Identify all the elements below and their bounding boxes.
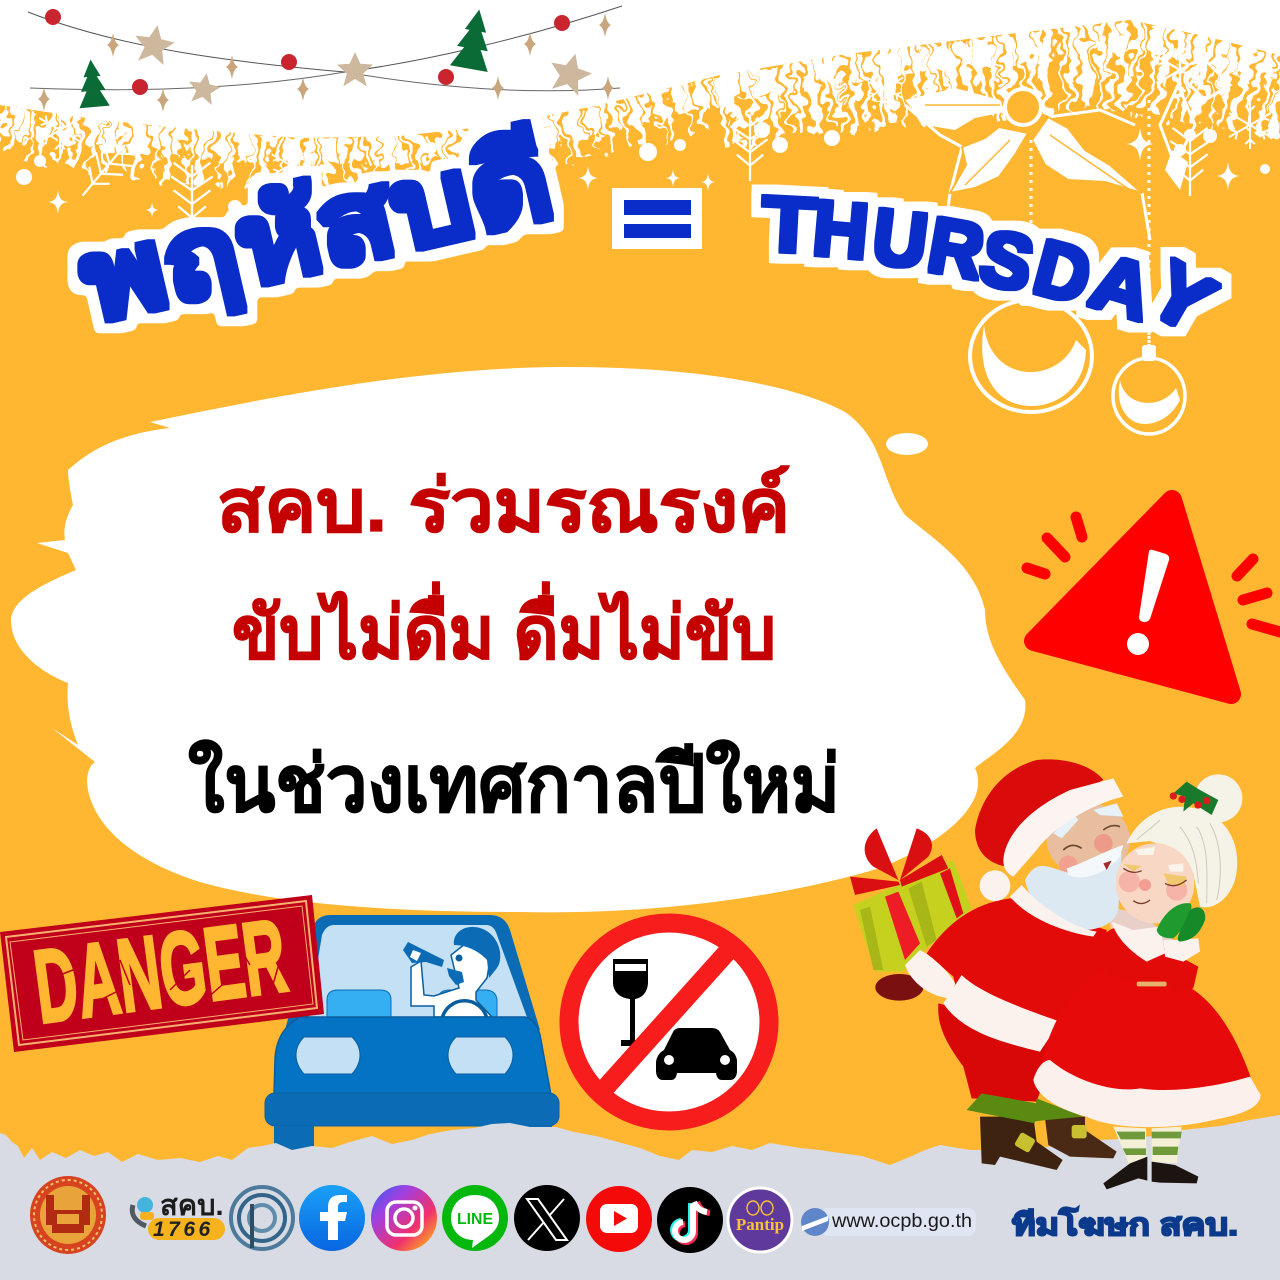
no drink and drive sign bbox=[569, 923, 769, 1121]
title: THURSDAY: A bbox=[1081, 237, 1163, 337]
footer icon: tiktok bbox=[657, 1187, 723, 1253]
santa face bbox=[1047, 803, 1130, 877]
dark glove bbox=[875, 974, 923, 1001]
footer icon: pantip bbox=[728, 1188, 792, 1252]
coat cuff bbox=[905, 950, 955, 998]
danger stamp bbox=[0, 895, 324, 1052]
title: THURSDAY: Y bbox=[1134, 243, 1230, 351]
title: THURSDAY: R bbox=[922, 202, 990, 296]
coat fur hem bbox=[943, 975, 1060, 1052]
bubble text line 3: ในช่วงเทศกาลปีใหม่ bbox=[188, 739, 840, 828]
title: THURSDAY: U bbox=[868, 193, 932, 286]
footer logo: agency seal bbox=[30, 1176, 106, 1254]
beard bbox=[1025, 853, 1122, 930]
santa coat bbox=[927, 898, 1107, 1027]
skirt fur hem bbox=[1033, 1060, 1261, 1127]
footer logo: CPB circle bbox=[231, 1187, 293, 1249]
neck backing bbox=[1107, 907, 1173, 960]
footer icon: instagram bbox=[371, 1185, 437, 1251]
title: Thai word: พฤหัสบดี bbox=[69, 116, 563, 345]
Mrs Claus skirt bbox=[1040, 967, 1252, 1097]
santa boots bbox=[967, 1093, 1117, 1170]
holly and snowflake ornament bbox=[905, 60, 1230, 345]
danger stamp: DANGER bbox=[28, 899, 293, 1046]
title: THURSDAY: S bbox=[972, 213, 1041, 309]
footer website: www.ocpb.go.th bbox=[831, 1210, 972, 1232]
driver bbox=[403, 927, 500, 1019]
title: THURSDAY bbox=[759, 180, 1230, 351]
footer logo: hotline 1766 bbox=[132, 1190, 225, 1241]
bubble text line 1: สคบ. ร่วมรณรงค์ bbox=[217, 466, 790, 547]
title: THURSDAY: T bbox=[759, 180, 818, 270]
gift box bbox=[850, 828, 972, 972]
footer icon: line: LINE bbox=[457, 1211, 493, 1228]
Santa and Mrs Claus illustration bbox=[850, 759, 1261, 1189]
santa hat bbox=[975, 759, 1103, 867]
Mrs Claus sleeve and bodice bbox=[1100, 927, 1198, 992]
seats bbox=[327, 990, 497, 1018]
ornaments bbox=[970, 292, 1185, 434]
collar and mitten bbox=[1112, 903, 1205, 962]
holly in hair bbox=[1170, 782, 1218, 815]
footer website bbox=[801, 1208, 976, 1236]
pompom bbox=[980, 870, 1010, 901]
bubble text line 2: ขับไม่ดื่ม ดื่มไม่ขับ bbox=[232, 581, 776, 674]
title: equals sign bbox=[612, 188, 702, 249]
warning triangle icon bbox=[1027, 500, 1280, 694]
footer icon: youtube bbox=[586, 1186, 652, 1252]
title: THURSDAY: D bbox=[1025, 224, 1100, 322]
footer icon: facebook bbox=[299, 1185, 365, 1251]
snowy top border bbox=[0, 0, 1280, 234]
title: THURSDAY: H bbox=[810, 185, 872, 276]
footer logo: hotline 1766: 1766 bbox=[153, 1218, 214, 1241]
snowy ground footer bbox=[0, 1115, 1280, 1280]
footer icon: X bbox=[514, 1185, 580, 1251]
footer team name: ทีมโฆษก สคบ. bbox=[1012, 1206, 1238, 1242]
speech bubble panel bbox=[11, 367, 1025, 912]
hat brim bbox=[1003, 778, 1123, 877]
Mrs Claus hair and face bbox=[1116, 774, 1242, 923]
santa trousers bbox=[938, 1003, 1060, 1102]
footer icon: pantip: Pantip bbox=[736, 1215, 784, 1234]
stockings and shoes bbox=[1103, 1127, 1198, 1189]
footer logo: hotline 1766: สคบ. bbox=[160, 1190, 224, 1222]
footer icon: line bbox=[442, 1185, 508, 1251]
string lights garland bbox=[28, 6, 622, 112]
car with drinking driver bbox=[265, 915, 559, 1156]
